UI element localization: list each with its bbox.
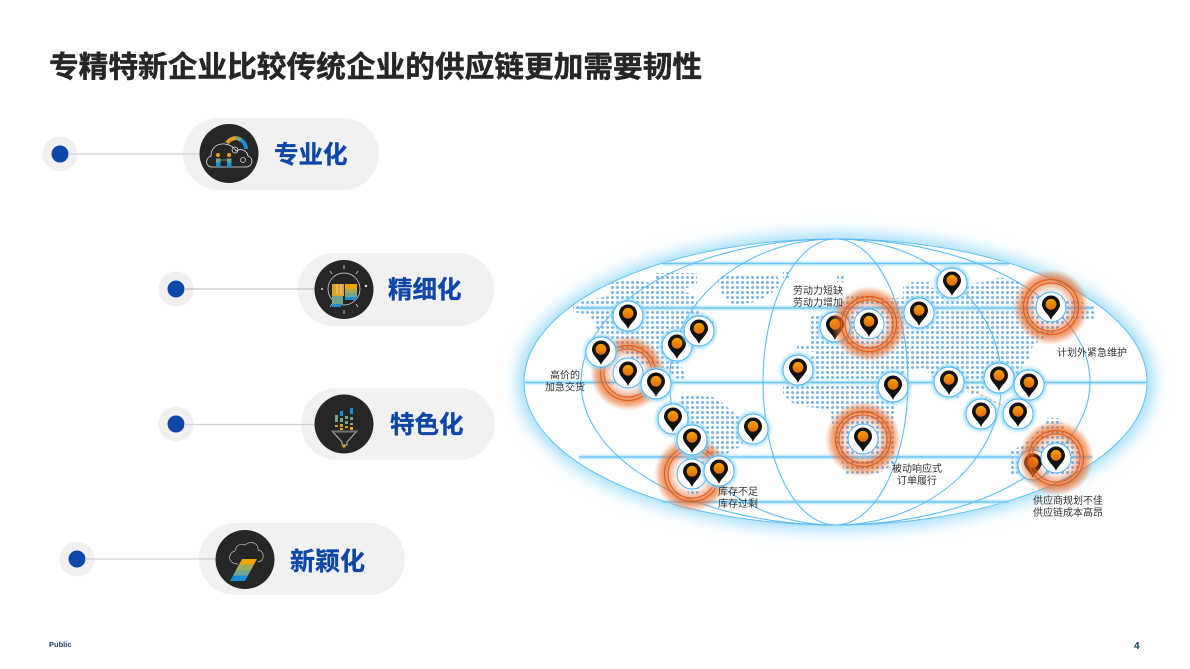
graticule lines — [524, 239, 1147, 525]
label: 特色化 — [390, 411, 464, 439]
icon: cloud with people and gear — [200, 124, 258, 183]
icon: funnel with bars — [314, 394, 374, 454]
connector dot — [158, 272, 194, 306]
hot spots — [590, 269, 1094, 512]
label: 供应商: 供应商规划不佳 — [1033, 494, 1103, 507]
label: 被动响应式: 被动响应式 — [892, 462, 942, 475]
label: 专业化 — [274, 141, 348, 169]
faint link between pins — [967, 388, 1001, 405]
label: 库存: 库存不足 — [718, 485, 758, 498]
map labels — [545, 284, 1127, 519]
label: 高价的 加急交货: 高价的 — [550, 368, 580, 382]
location pins — [584, 266, 1071, 489]
item: 特色化 — [158, 388, 495, 460]
pill — [183, 118, 379, 190]
page number: 4 — [1134, 641, 1140, 652]
pins under hot spots — [818, 310, 1050, 482]
globe ellipse — [524, 239, 1147, 525]
title: 专精特新企业比较传统企业的供应链更加需要韧性 — [49, 51, 702, 84]
item: 精细化 — [158, 253, 494, 326]
icon: brain and charts — [314, 260, 374, 319]
connector dot — [42, 136, 78, 172]
connector dot — [158, 406, 194, 442]
item: 专业化 — [42, 118, 379, 190]
label: 供应商: 供应链成本高昂 — [1033, 506, 1103, 519]
label: 库存: 库存过剩 — [718, 497, 758, 510]
label: 被动响应式: 订单履行 — [897, 474, 937, 487]
dotted continents — [573, 272, 1094, 494]
label: 高价的 加急交货: 加急交货 — [545, 380, 585, 394]
footer: Public: Public — [49, 640, 72, 649]
label: 劳动力: 劳动力短缺 — [793, 284, 843, 297]
label: 劳动力: 劳动力增加 — [793, 296, 843, 309]
label: 精细化 — [388, 276, 462, 304]
pill — [298, 253, 494, 326]
label: 计划外紧急维护: 计划外紧急维护 — [1057, 346, 1127, 359]
connector dot — [60, 542, 94, 576]
map glow — [516, 233, 1154, 531]
item: 新颖化 — [60, 523, 405, 595]
icon: cloud and colour stack — [216, 530, 274, 589]
pill — [301, 388, 495, 460]
label: 新颖化 — [290, 548, 365, 576]
pill — [199, 523, 405, 595]
panel: world map — [516, 233, 1154, 531]
